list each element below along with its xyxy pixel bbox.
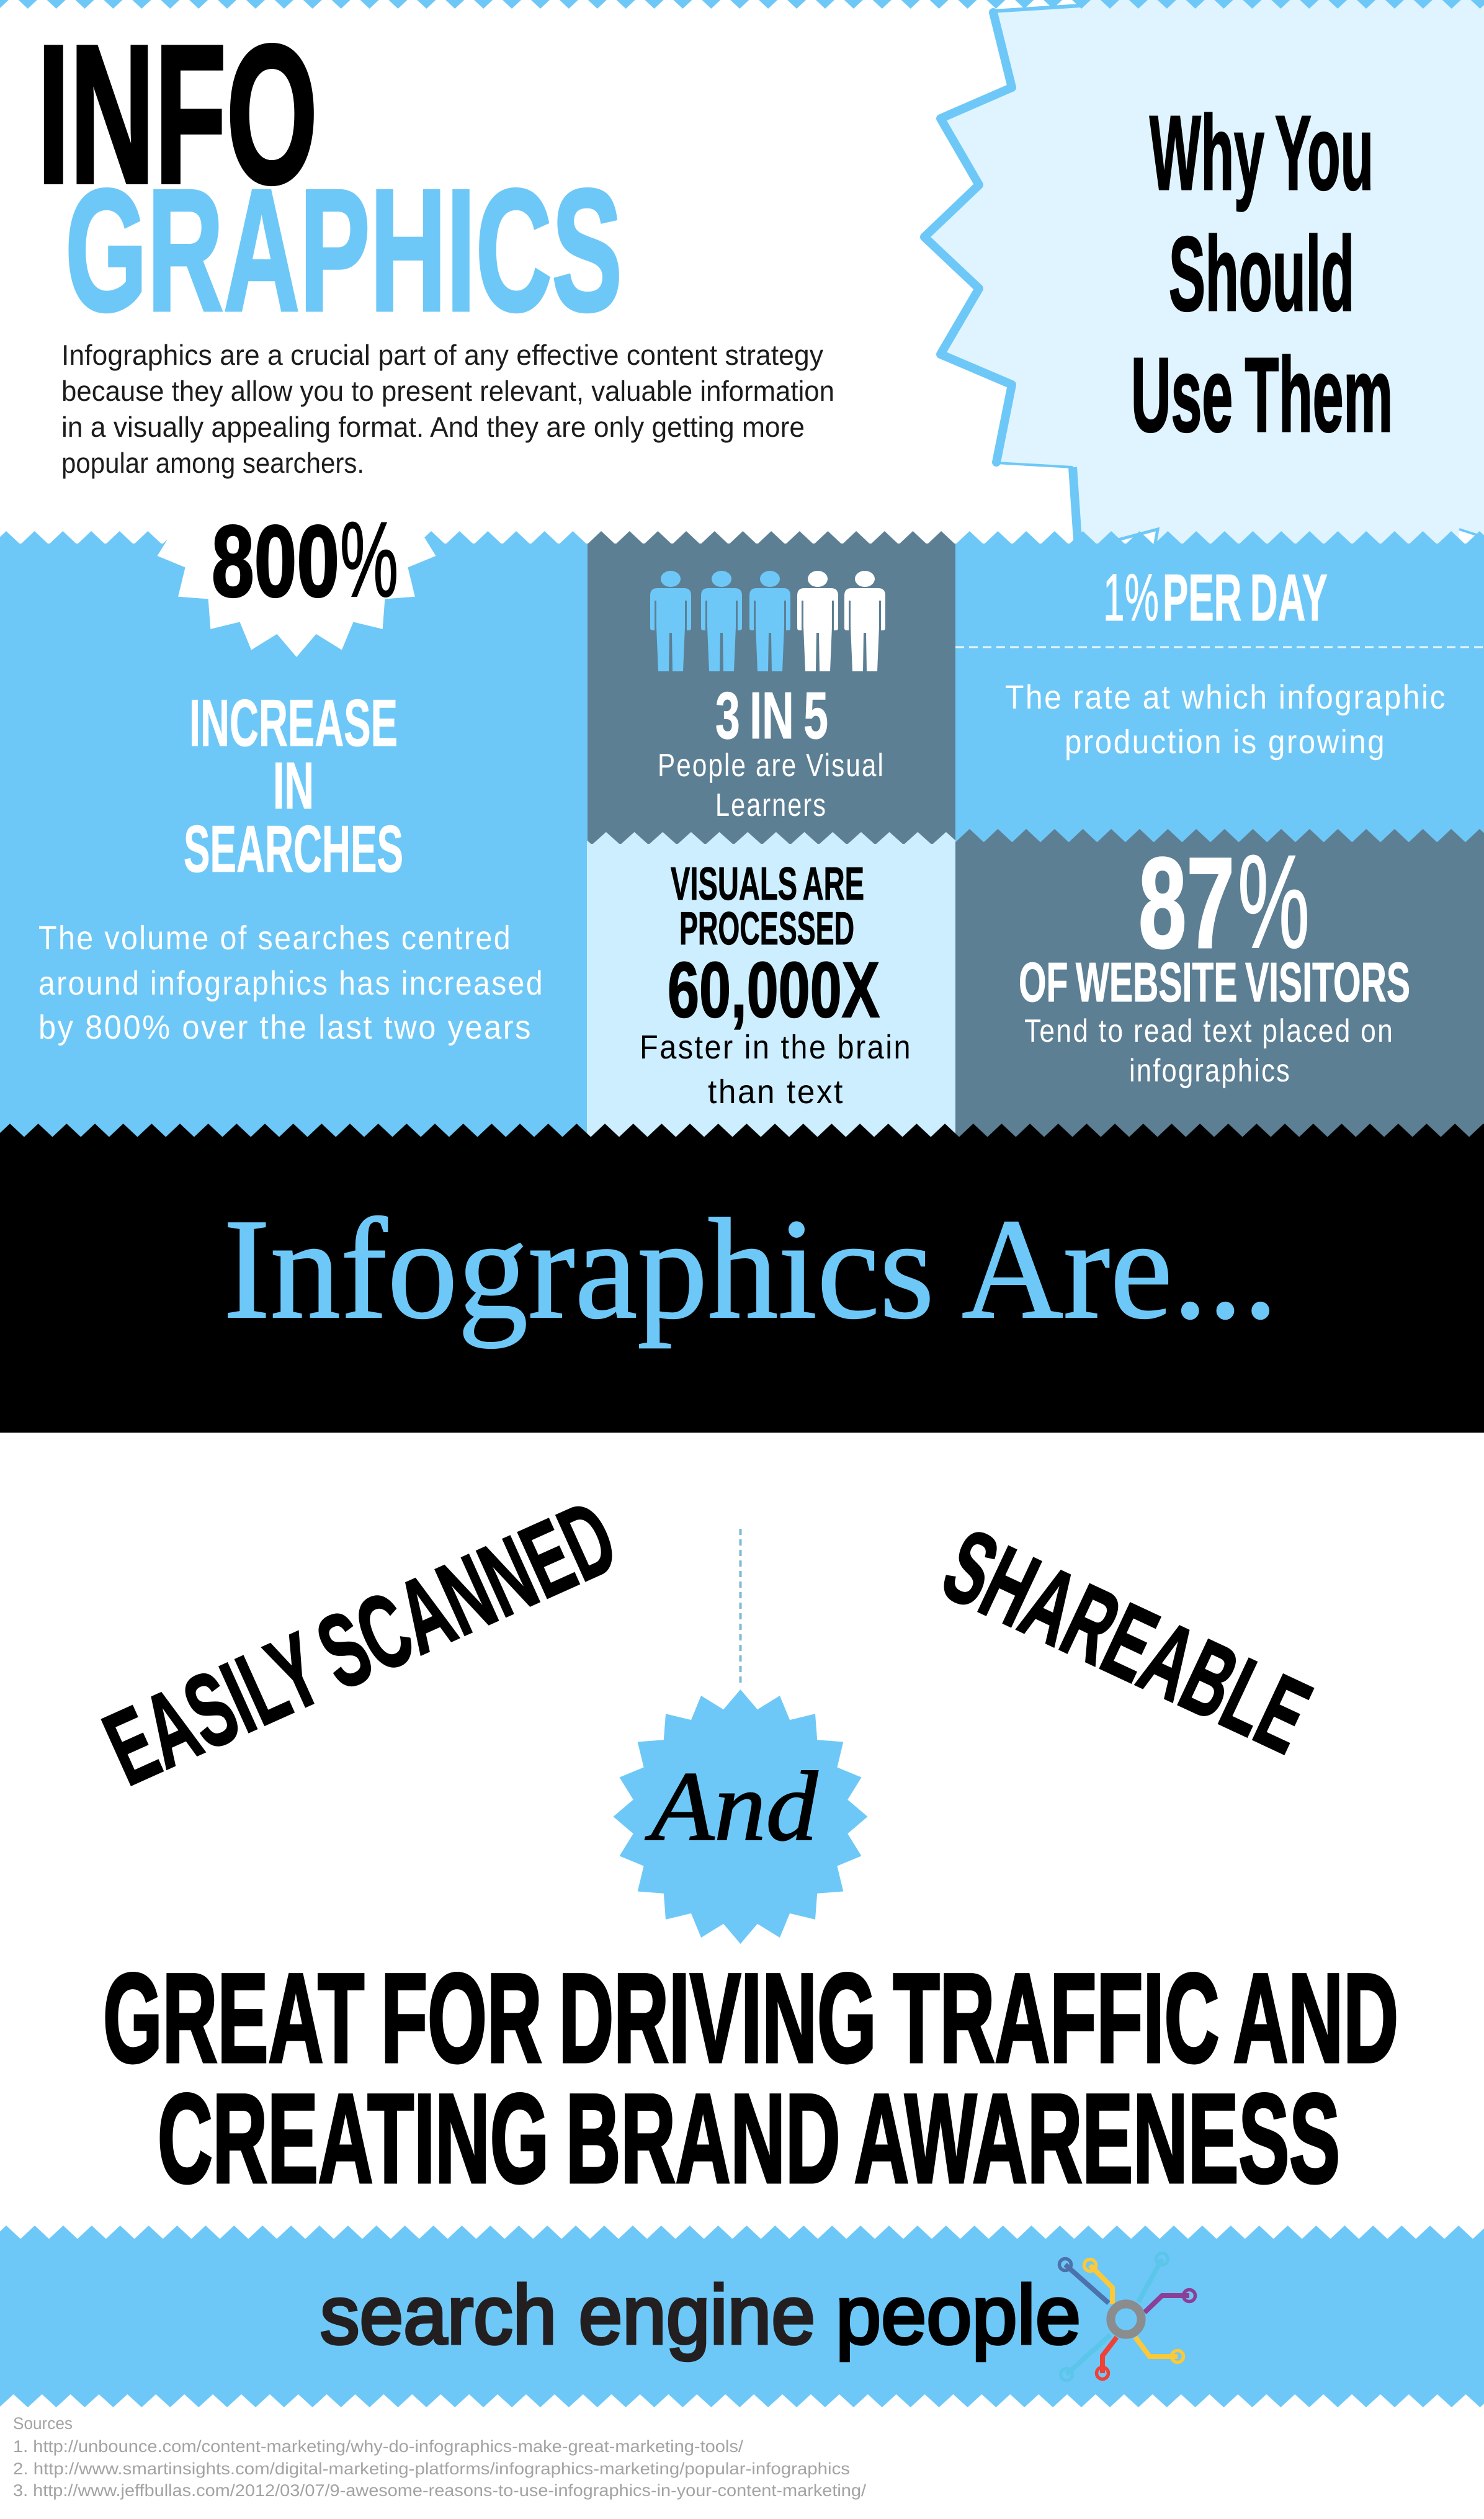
- panel: black banner: [0, 1124, 1484, 1433]
- text: search volume description: The volume of searches centred: [38, 919, 512, 957]
- intro paragraph: in a visually appealing format. And they are only getting more: [61, 411, 805, 443]
- intro paragraph: Infographics are a crucial part of any effective content strategy: [61, 339, 823, 371]
- sources: Sources: [13, 2414, 73, 2433]
- burst: why you should use them: [924, 0, 1484, 552]
- panel: stats background: [0, 531, 1484, 1137]
- stat: visuals processed 60,000x faster: than text: [708, 1073, 844, 1111]
- headline: great for driving traffic: [103, 1948, 1398, 2209]
- icon: logo hub and nodes: [1060, 2253, 1195, 2380]
- stat: 800% figure: %: [340, 500, 398, 619]
- burst: and: [613, 1689, 867, 1944]
- text: search volume description: by 800% over the last two years: [38, 1009, 532, 1046]
- logo wordmark: search engine people: search engine: [320, 2269, 815, 2361]
- heading: increase in searches: SEARCHES: [184, 812, 403, 886]
- heading: increase in searches: IN: [273, 748, 314, 823]
- text: production rate: [1005, 679, 1447, 761]
- icon: five people, three highlighted: [650, 571, 885, 671]
- sources: 1. http://unbounce.com/content-marketing/why-do-infographics-make-great-marketing-tools/: [13, 2437, 744, 2456]
- heading: increase in searches: [184, 686, 403, 886]
- stat: 87% of website visitors: 87: [1138, 831, 1235, 975]
- stat: 1% per day: PER DAY: [1163, 560, 1328, 635]
- white burst behind 800%: [150, 364, 443, 657]
- top zigzag border: [0, 0, 1484, 9]
- panel: footer band: [0, 2226, 1484, 2407]
- stat: 87% of website visitors: infographics: [1129, 1053, 1291, 1089]
- heading: infographics are: Infographics Are...: [223, 1189, 1278, 1349]
- intro paragraph: because they allow you to present relevant, valuable information: [61, 375, 834, 407]
- sources: 2. http://www.smartinsights.com/digital-marketing-platforms/infographics-marketing/popular-infographics: [13, 2459, 850, 2478]
- burst: and: And: [645, 1751, 818, 1861]
- heading: why you should use them: [1131, 94, 1393, 454]
- intro paragraph: [61, 339, 834, 479]
- intro paragraph: popular among searchers.: [61, 447, 364, 479]
- text: production rate: production is growing: [1065, 723, 1386, 761]
- sources: 3. http://www.jeffbullas.com/2012/03/07/9-awesome-reasons-to-use-infographics-in-your-content-marketing/: [13, 2481, 867, 2500]
- logo wordmark: search engine people: people: [836, 2269, 1081, 2361]
- stat: visuals processed 60,000x faster: PROCESSED: [679, 902, 854, 954]
- title: [37, 4, 622, 347]
- text: search volume description: [38, 919, 544, 1046]
- stat: 3 in 5: Learners: [715, 787, 827, 823]
- stat: 3 in 5: People are Visual: [658, 748, 885, 784]
- stat: visuals processed 60,000x faster: [640, 857, 912, 1111]
- heading: increase in searches: INCREASE: [189, 686, 398, 760]
- stat: 1% per day: [1103, 560, 1328, 635]
- stat: 800% figure: 800: [212, 504, 339, 618]
- stat: visuals processed 60,000x faster: VISUALS ARE: [671, 857, 864, 910]
- stat: 87% of website visitors: Tend to read text placed on: [1024, 1013, 1394, 1049]
- title: INFO: [37, 4, 318, 225]
- stat: 87% of website visitors: [1019, 828, 1410, 1089]
- stat: visuals processed 60,000x faster: 60,000X: [668, 946, 880, 1034]
- logo wordmark: search engine people: [320, 2269, 1081, 2361]
- rotated label: easily scanned: EASILY SCANNED: [89, 1478, 632, 1807]
- stat: 87% of website visitors: %: [1238, 828, 1310, 976]
- stat: 1% per day: 1%: [1103, 560, 1159, 635]
- stat: visuals processed 60,000x faster: Faster in the brain: [640, 1029, 912, 1066]
- title: GRAPHICS: [65, 154, 622, 347]
- stat: 3 in 5: [658, 678, 885, 823]
- text: search volume description: around infographics has increased: [38, 965, 544, 1002]
- sources: [13, 2414, 867, 2500]
- stat: 3 in 5: 3 IN 5: [715, 678, 828, 753]
- text: production rate: The rate at which infographic: [1005, 679, 1447, 716]
